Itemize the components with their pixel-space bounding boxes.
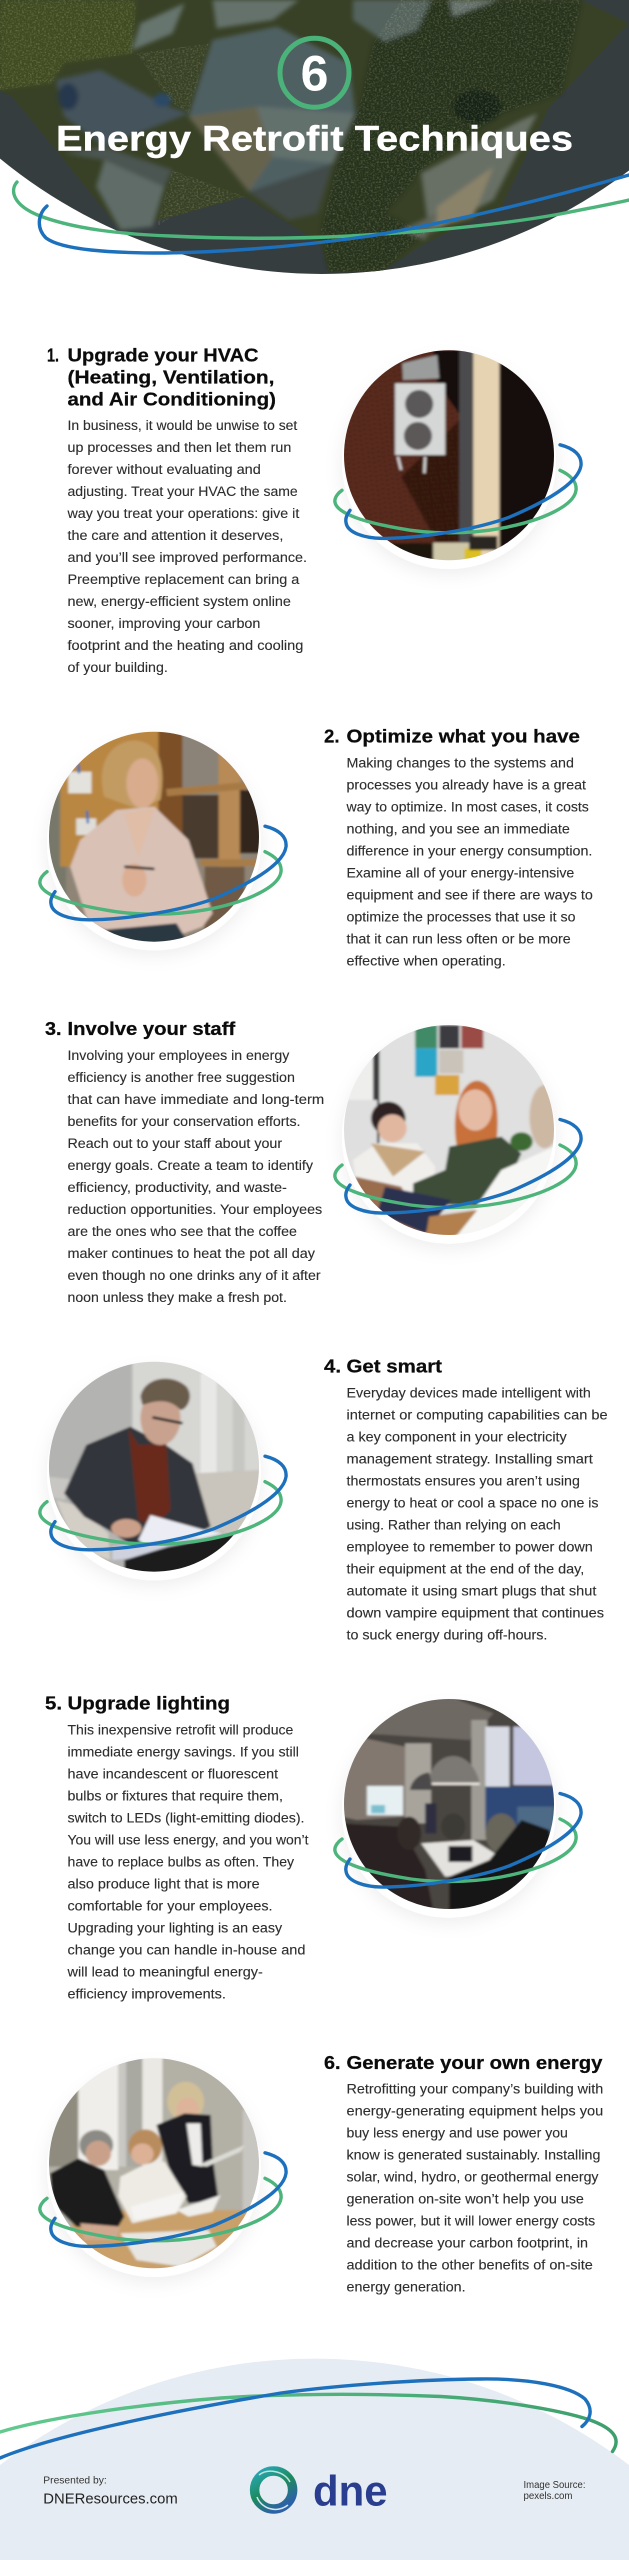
presented by <box>43 2474 178 2508</box>
section 6: generate energy <box>40 2052 603 2295</box>
header banner <box>0 0 629 280</box>
body text 3: Involving your employees in energy <box>68 1048 290 1063</box>
heading 1: (Heating, Ventilation, <box>68 367 274 388</box>
presented by: DNEResources.com <box>43 2492 178 2508</box>
body text 4: to suck energy during off-hours. <box>346 1627 547 1642</box>
body text 3: efficiency, productivity, and waste- <box>68 1180 287 1195</box>
body text 1: up processes and then let them run <box>68 440 291 455</box>
body text 1: and you’ll see improved performance. <box>68 550 307 565</box>
body text 5: efficiency improvements. <box>68 1986 226 2001</box>
body text 2: optimize the processes that use it so <box>346 909 576 924</box>
heading 2: 2. <box>324 725 340 746</box>
body text 2: nothing, and you see an immediate <box>346 821 570 836</box>
body text 6: energy-generating equipment helps you <box>346 2104 603 2119</box>
logo: dne <box>255 2468 388 2516</box>
body text 6: generation on-site won’t help you use <box>346 2192 584 2207</box>
image source: pexels.com <box>524 2491 572 2502</box>
body text 5: This inexpensive retrofit will produce <box>68 1722 293 1737</box>
footer swooshes <box>0 2379 616 2458</box>
body text 6: Retrofitting your company’s building with <box>346 2082 603 2097</box>
body text 1: of your building. <box>68 660 168 675</box>
swooshes 2 <box>40 826 286 920</box>
body text 2: difference in your energy consumption. <box>346 843 592 858</box>
heading 5: 5. <box>45 1692 62 1713</box>
body text 5: have incandescent or fluorescent <box>68 1766 278 1781</box>
image source <box>524 2480 586 2502</box>
body text 5 <box>66 1722 309 2001</box>
logo: dne: dne <box>313 2468 388 2516</box>
body text 4: employee to remember to power down <box>346 1539 593 1554</box>
swooshes 1 <box>335 445 581 538</box>
body text 5: immediate energy savings. If you still <box>68 1744 299 1759</box>
section 1: upgrade HVAC <box>47 345 581 675</box>
body text 3: are the ones who see that the coffee <box>68 1224 297 1239</box>
body text 5: comfortable for your employees. <box>68 1898 272 1913</box>
body text 3 <box>68 1048 324 1305</box>
body text 4: thermostats ensures you aren’t using <box>346 1473 580 1488</box>
body text 6: know is generated sustainably. Installing <box>346 2148 600 2163</box>
heading 4: 4. <box>324 1355 341 1376</box>
body text 2: that it can run less often or be more <box>346 931 571 946</box>
body text 3: reduction opportunities. Your employees <box>68 1202 323 1217</box>
heading 1: and Air Conditioning) <box>68 389 276 410</box>
body text 5: also produce light that is more <box>68 1876 260 1891</box>
heading 1: Upgrade your HVAC <box>68 345 258 366</box>
swooshes 5 <box>335 1794 581 1887</box>
heading 2: Optimize what you have <box>346 725 580 746</box>
section 5: upgrade lighting <box>45 1692 581 2001</box>
body text 1: sooner, improving your carbon <box>68 616 260 631</box>
body text 4: energy to heat or cool a space no one is <box>346 1495 599 1510</box>
heading 3: Involve your staff <box>68 1018 236 1039</box>
body text 2: effective when operating. <box>346 953 506 968</box>
body text 5: You will use less energy, and you won’t <box>68 1832 309 1847</box>
icon: number six ring <box>280 38 349 107</box>
body text 2: equipment and see if there are ways to <box>346 887 593 902</box>
photo 1: outdoor HVAC unit <box>335 347 581 569</box>
heading 6: 6. <box>324 2052 340 2073</box>
photo 6: three colleagues with documents <box>40 2053 286 2277</box>
header swooshes <box>14 175 629 253</box>
photo 5: meeting room with lamps <box>335 1693 581 1918</box>
presented by: Presented by: <box>43 2474 107 2486</box>
body text 3: benefits for your conservation efforts. <box>68 1114 300 1129</box>
heading 5: Upgrade lighting <box>68 1692 230 1713</box>
body text 4: Everyday devices made intelligent with <box>346 1385 591 1400</box>
body text 6: less power, but it will lower energy costs <box>346 2214 596 2229</box>
body text 5: change you can handle in-house and <box>68 1942 305 1957</box>
body text 3: noon unless they make a fresh pot. <box>68 1290 287 1305</box>
body text 1: way you treat your operations: give it <box>66 506 300 521</box>
body text 4: automate it using smart plugs that shut <box>346 1583 597 1598</box>
body text 5: bulbs or fixtures that require them, <box>68 1788 283 1803</box>
body text 3: efficiency is another free suggestion <box>68 1070 295 1085</box>
body text 4: management strategy. Installing smart <box>346 1451 593 1466</box>
body text 4: internet or computing capabilities can be <box>346 1407 608 1422</box>
swooshes 6 <box>40 2153 286 2246</box>
body text 6: solar, wind, hydro, or geothermal energy <box>346 2170 599 2185</box>
body text 1: Preemptive replacement can bring a <box>68 572 300 587</box>
number 6: 6 <box>301 46 328 102</box>
body text 3: Reach out to your staff about your <box>68 1136 283 1151</box>
body text 4: a key component in your electricity <box>346 1429 567 1444</box>
body text 1: In business, it would be unwise to set <box>68 418 298 433</box>
body text 3: energy goals. Create a team to identify <box>68 1158 313 1173</box>
body text 3: maker continues to heat the pot all day <box>68 1246 315 1261</box>
body text 1: footprint and the heating and cooling <box>68 638 303 653</box>
heading 6: Generate your own energy <box>346 2052 603 2073</box>
body text 2: processes you already have is a great <box>346 777 586 792</box>
body text 2: Examine all of your energy-intensive <box>346 865 574 880</box>
body text 4: using. Rather than relying on each <box>346 1517 561 1532</box>
body text 5: switch to LEDs (light-emitting diodes). <box>68 1810 304 1825</box>
body text 1: new, energy-efficient system online <box>68 594 291 609</box>
heading 3: 3. <box>45 1018 62 1039</box>
footer <box>0 2359 629 2560</box>
body text 3: that can have immediate and long-term <box>68 1092 324 1107</box>
body text 5: Upgrading your lighting is an easy <box>68 1920 282 1935</box>
body text 1: adjusting. Treat your HVAC the same <box>68 484 298 499</box>
title: Energy Retrofit Techniques <box>56 120 573 159</box>
body text 1: the care and attention it deserves, <box>68 528 283 543</box>
photo 3: colleagues at a table <box>335 1020 581 1244</box>
body text 6: energy generation. <box>346 2280 466 2295</box>
header dark circle with photo <box>0 0 629 280</box>
section 3: involve staff <box>45 1018 581 1305</box>
swooshes 3 <box>335 1120 581 1213</box>
body text 5: have to replace bulbs as often. They <box>68 1854 294 1869</box>
photo 4: man reading papers <box>40 1357 286 1580</box>
body text 6: buy less energy and use power you <box>346 2126 568 2141</box>
swooshes 4 <box>40 1456 286 1550</box>
body text 4 <box>346 1385 608 1642</box>
body text 5: will lead to meaningful energy- <box>66 1964 263 1979</box>
body text 2: Making changes to the systems and <box>346 755 574 770</box>
footer pale dome <box>0 2359 629 2560</box>
heading 4: Get smart <box>346 1355 442 1376</box>
body text 6: and decrease your carbon footprint, in <box>346 2236 588 2251</box>
body text 1: forever without evaluating and <box>68 462 261 477</box>
body text 1 <box>66 418 307 675</box>
section 4: get smart <box>40 1355 608 1642</box>
body text 4: down vampire equipment that continues <box>346 1605 604 1620</box>
body text 2 <box>345 755 593 968</box>
section 2: optimize <box>40 725 593 968</box>
heading 1: 1. <box>47 345 59 366</box>
body text 3: even though no one drinks any of it after <box>68 1268 321 1283</box>
body text 6 <box>346 2082 603 2295</box>
body text 6: addition to the other benefits of on-site <box>346 2258 593 2273</box>
photo 2: woman with pen <box>40 727 286 950</box>
body text 4: their equipment at the end of the day, <box>346 1561 584 1576</box>
image source: Image Source: <box>524 2480 586 2491</box>
body text 2: way to optimize. In most cases, it costs <box>345 799 589 814</box>
heading 1 <box>47 345 276 410</box>
